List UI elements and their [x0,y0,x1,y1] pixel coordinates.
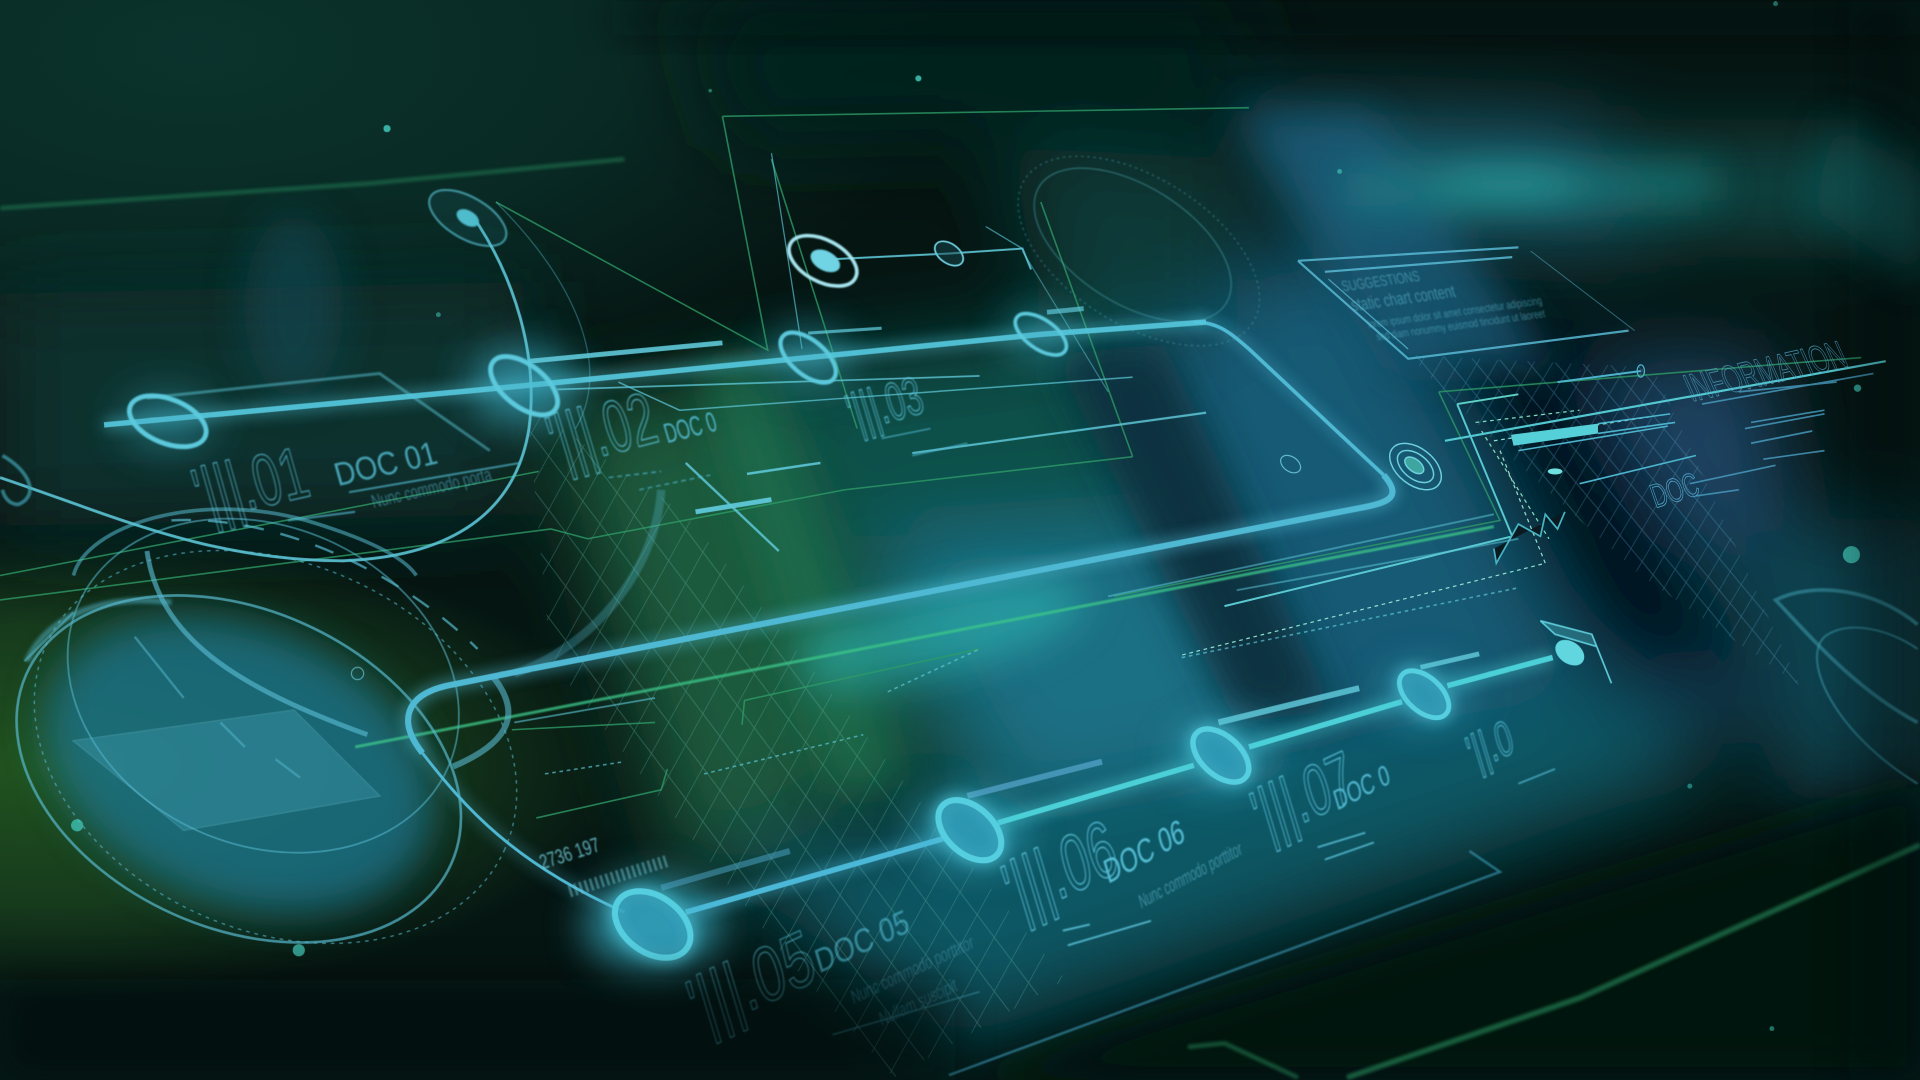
label 08: '||.0 [1460,709,1519,782]
panel text: sed diam nonummy euismod tincidunt ut laoreet [1375,308,1547,344]
node: 06 [927,788,1013,872]
label 02: '|||.02 [538,377,666,484]
label 01: Nunc commodo porta [369,464,495,513]
node glow halos [121,310,1466,971]
dashed orbit top centre [986,117,1292,385]
node: 04 [1008,305,1073,363]
panel text: lorem ipsum dolor sit amet consectetur adipiscing [1366,295,1544,331]
upper link lines [147,153,1518,888]
main rounded circuit line [408,322,1393,912]
node: 08 [1391,662,1457,727]
lower timeline nodes [602,662,1457,971]
upper timeline [104,322,1206,425]
label 06: '|||.06 [994,803,1127,938]
label 06: Nunc commodo porttitor [1137,838,1244,913]
translucent radar panel [73,710,380,830]
label 05: Nunc commodo porttitor [849,931,977,1009]
top ring core [453,205,482,230]
label 06: DOC 06 [1100,812,1189,892]
node: 02 [480,345,568,426]
small ring [1277,452,1304,476]
right data panel: DOC [1646,466,1704,516]
node: 07 [1183,719,1258,792]
code label [536,833,667,891]
label 01: DOC 01 [330,434,441,493]
label 08 [1460,709,1555,784]
lower timeline [686,658,1553,912]
panel text: SUGGESTIONS [1339,267,1422,295]
right edge rings [2,456,1918,784]
label 03 [840,366,967,456]
label 07: '|||.07 [1243,735,1363,857]
label 03: '|||.03 [840,366,930,444]
top-left arc sphere [0,202,590,561]
upper timeline nodes [122,179,1073,457]
label 05: '|||.05 [678,914,824,1051]
right data panel [1182,333,1886,655]
label 06 [994,803,1244,945]
label 02 [538,377,720,490]
horizontal light streak [355,527,1494,747]
node: 05 [602,878,703,971]
panel text [1339,267,1547,344]
label 05 [678,902,980,1051]
diagonal mesh grid: right [1408,355,1800,686]
node: top ring [420,179,515,257]
label 01 [184,433,520,536]
label 07: DOC 0 [1330,759,1393,817]
right data panel: INFORMATION [1677,333,1853,409]
end marker [1540,621,1611,683]
diagonal mesh grid: left [527,404,1065,1078]
node: 03 [772,323,845,392]
node: small target [930,236,968,271]
upper-right document panel [1298,247,1635,359]
label 05: Nullam suscipit [877,974,960,1031]
lower panel bottom edge [949,851,1500,1075]
node: 01 [122,386,213,457]
label 02: DOC 0 [660,406,720,449]
big lower-left radar circle [0,458,661,1017]
node: large target [781,225,865,296]
label 01: '|||.01 [184,433,317,536]
code label: 2736 197 [536,833,603,874]
panel text: static chart content [1349,282,1458,315]
target icon [1381,434,1450,499]
label 05: DOC 05 [810,902,913,981]
